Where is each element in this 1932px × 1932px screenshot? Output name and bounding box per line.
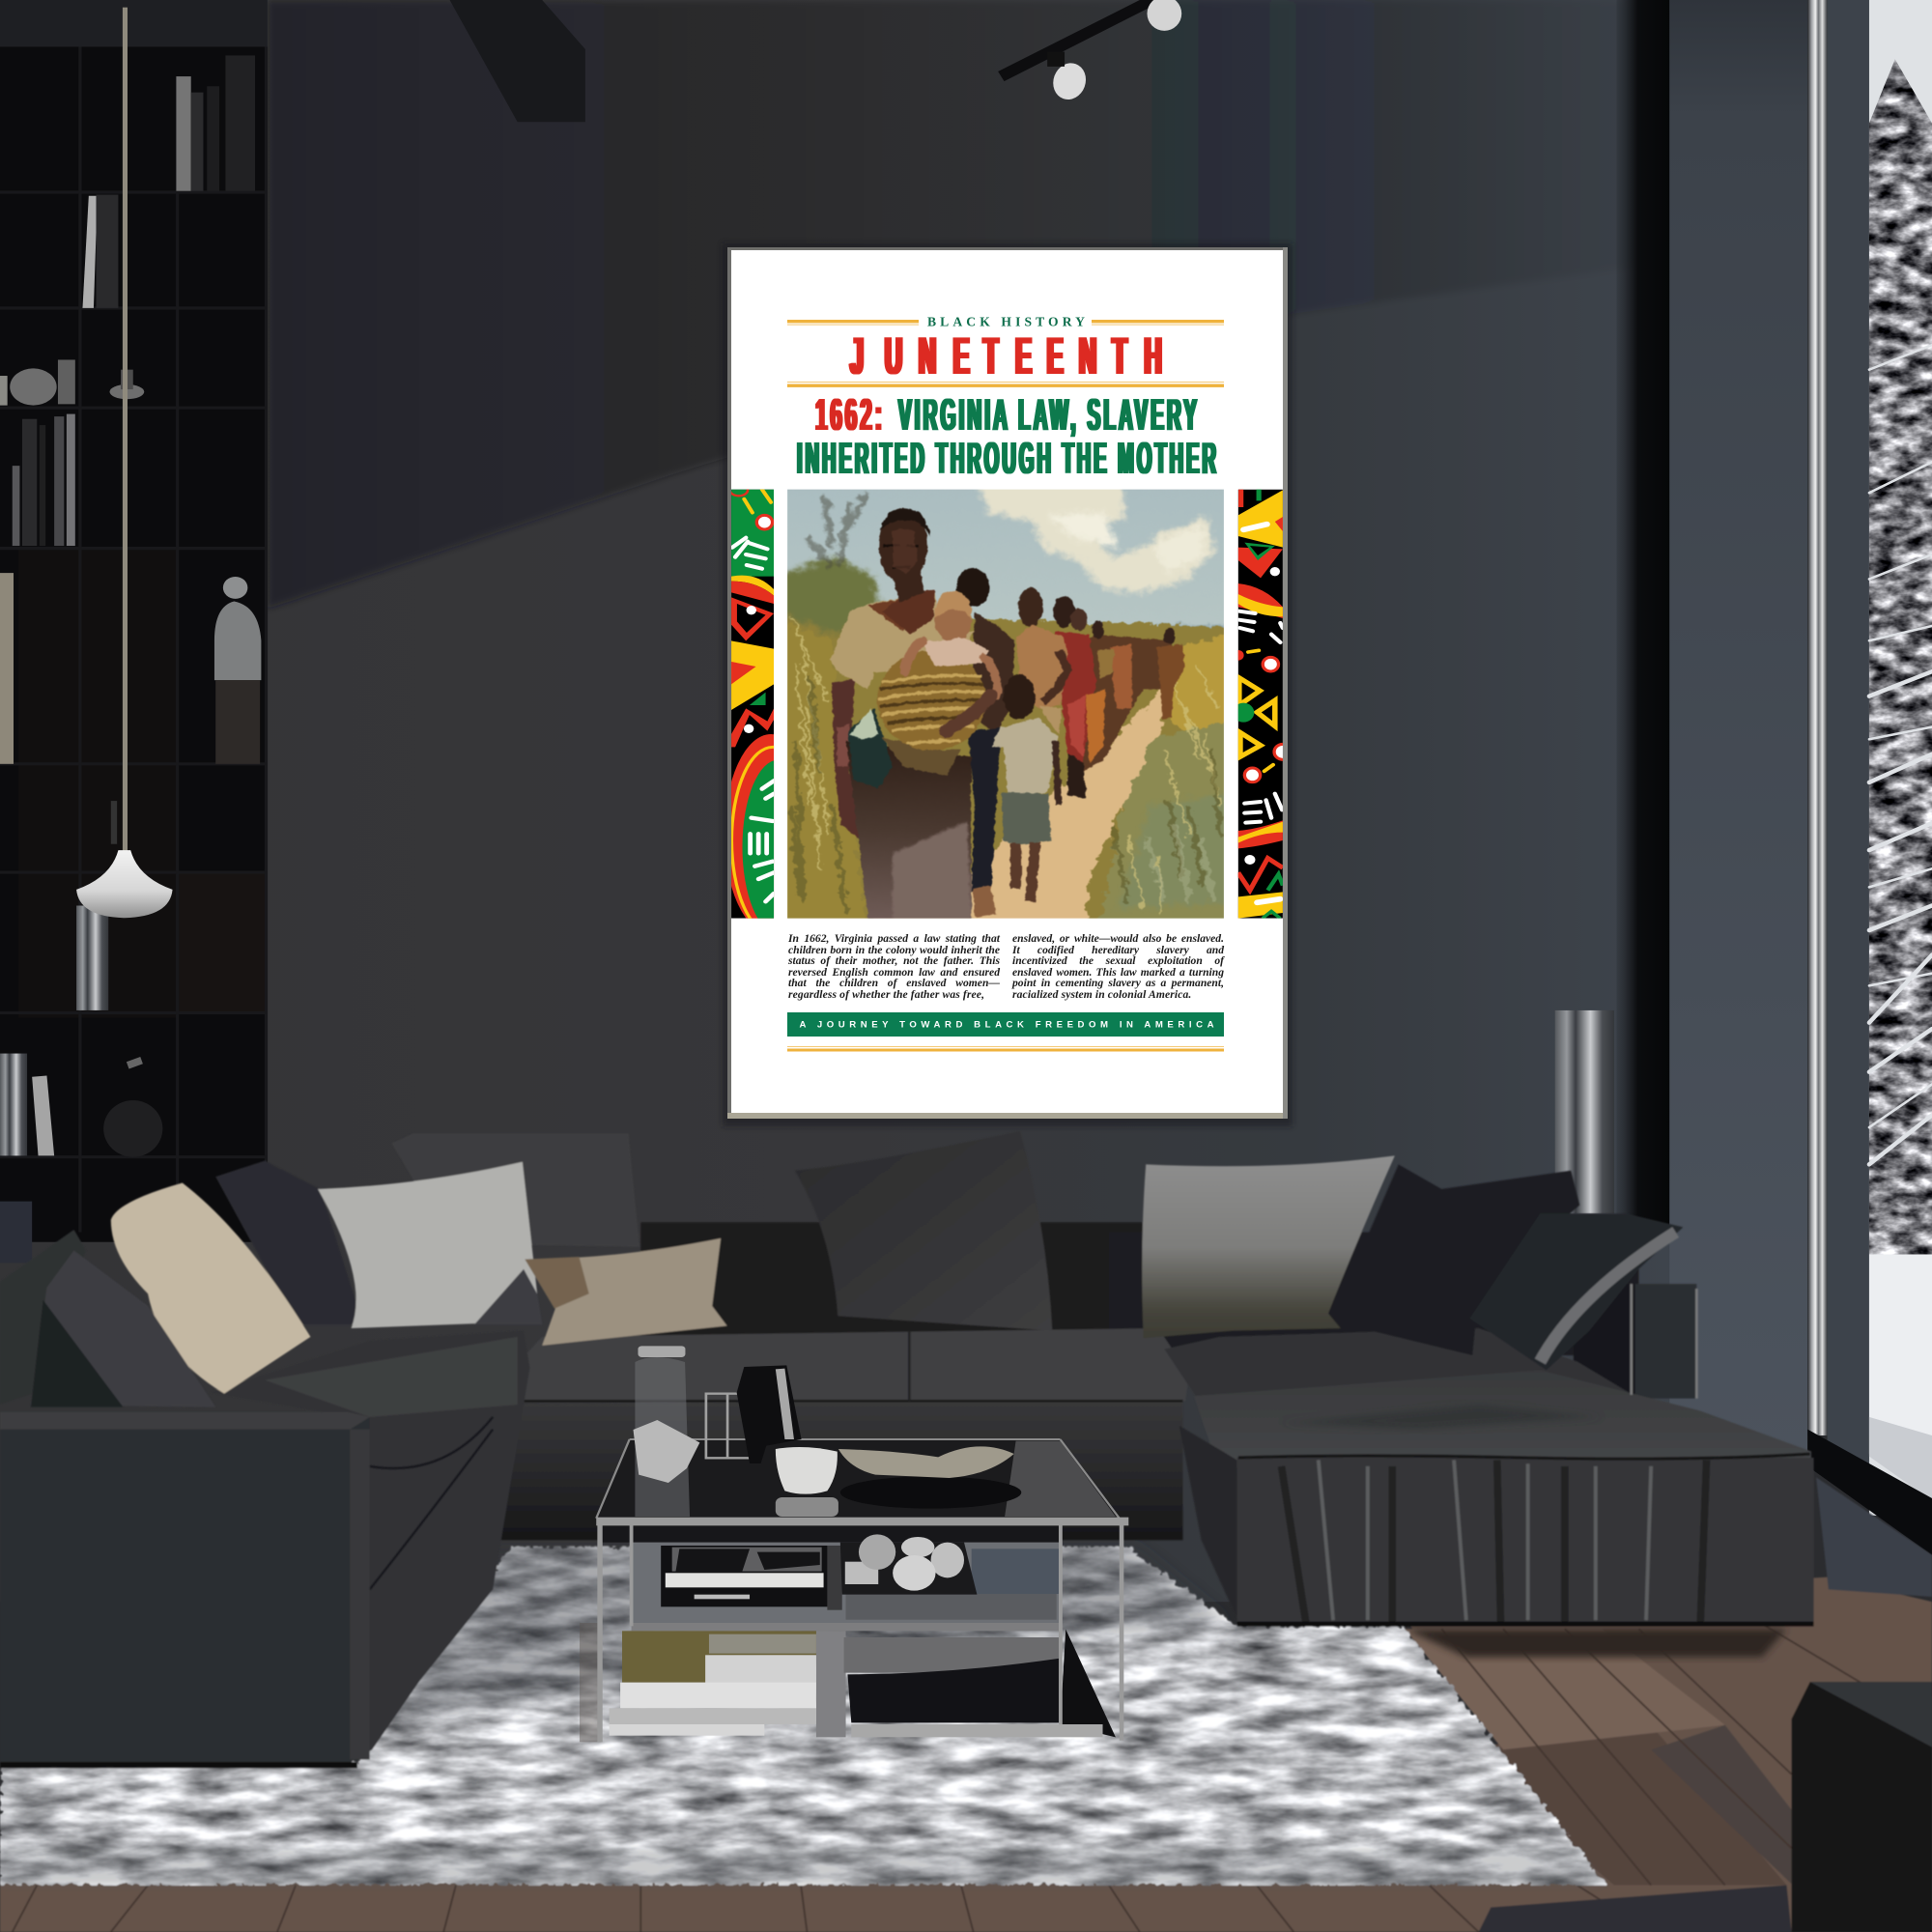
wood floor [0,1477,1932,1932]
dirt path [873,689,1165,919]
pillow: beige small [474,1238,727,1346]
body text: right column: enslaved, or white—would also be enslaved. [1012,932,1224,945]
chrome cylinder [1555,1010,1614,1213]
tray with eggs [840,1534,977,1595]
pillow: dark navy [1331,1164,1579,1355]
sculptural bowl [838,1446,1014,1478]
body text: right column [1011,932,1225,1001]
man behind mother [956,568,1014,918]
green banner: A JOURNEY TOWARD BLACK FREEDOM IN AMERICA [800,1019,1214,1030]
landscape: sky, meadow and path [787,489,1224,919]
sky and clouds [787,489,1224,630]
white cup [776,1447,838,1494]
pillow: far right [1470,1213,1683,1370]
pillow: cream [111,1182,310,1394]
pillow: dark round left [215,1161,363,1324]
framed poster: INHERITED THROUGH THE MOTHER [797,433,1219,483]
body text: right column: incentivized the sexual exploitation of [1012,954,1224,967]
armchair foreground [1792,1682,1932,1932]
window with snowy tree [1869,0,1932,1516]
body text: left column [788,932,1001,1001]
body text: left column: children born in the colony would inherit the [788,944,1000,956]
green banner [787,1012,1224,1037]
poster paper [731,250,1283,1113]
table frame [596,1518,1128,1742]
body text: right column: enslaved women. This law marked a turning [1012,966,1224,979]
body text: right column: point in cementing slavery as a permanent, [1012,977,1224,989]
main title: Juneteenth: JUNETEENTH [850,327,1162,386]
bookshelf [0,0,268,1263]
books on shelves [0,55,255,1157]
ceiling beam [450,0,585,122]
wall [0,0,1676,1602]
statue [214,577,261,764]
woven basket [877,650,986,751]
subtitle: 1662 Virginia Law: 1662: [815,389,885,440]
chaise section [1164,1328,1814,1627]
body text: right column: It codified hereditary slavery and [1012,944,1224,956]
pillow: back charcoal [392,1133,639,1247]
track light [998,0,1181,104]
pillow: light grey [318,1162,537,1328]
woman in tan blouse [1016,587,1067,734]
woman in red wrap [1053,596,1105,799]
floor, rug and furniture [0,1131,1932,1932]
body text: left column: regardless of whether the father was free, [788,988,984,1001]
shag rug [0,1547,1606,1886]
pillow: centre charcoal [795,1131,1052,1331]
sofa left arm [0,1412,370,1768]
eyebrow: Black History: BLACK HISTORY [927,315,1085,328]
figures in the procession [830,508,1185,940]
painting: mother carrying baby leading enslaved people along a path [787,489,1224,919]
sofa back cushions [640,1222,1696,1399]
procession of distant figures [1082,620,1185,773]
small glass box [706,1394,752,1458]
mid shelf showing rug [600,1526,1062,1625]
black vase with book [737,1365,802,1463]
right wall column and panels [1616,0,1869,1472]
body text: right column: racialized system in colonial America. [1012,988,1191,1001]
subtitle: 1662 Virginia Law [797,389,1219,483]
sofa centre section [491,1328,1189,1540]
glass coffee table [580,1346,1128,1742]
glass jar [633,1346,699,1517]
framed poster [723,243,1293,1126]
window sill [1807,1430,1932,1555]
lower shelf [580,1623,1116,1742]
book on mid shelf [661,1546,827,1606]
child [992,674,1059,901]
mother [830,508,975,940]
pillow: light grey right [1142,1155,1395,1338]
meadow [787,489,1224,919]
right decorative strip [1238,489,1283,919]
body text: left column: In 1662, Virginia passed a law stating that [788,932,1000,945]
body text: left column: reversed English common law and ensured [788,966,1000,979]
body text: left column: status of their mother, not the father. This [788,954,1000,967]
left decorative strip [731,489,775,919]
header rules [787,320,1224,387]
pendant lamp [76,8,173,918]
footer rule [787,1046,1224,1051]
framed poster: VIRGINIA LAW, SLAVERY [898,389,1200,440]
glass top [596,1439,1120,1519]
frame [723,243,1293,1126]
sofa left section [210,1331,529,1762]
right sofa arm highlight [1632,1284,1696,1399]
body text: left column: that the children of enslaved women— [788,977,1000,989]
baby [905,591,997,731]
pillow: slate front left [0,1230,215,1407]
